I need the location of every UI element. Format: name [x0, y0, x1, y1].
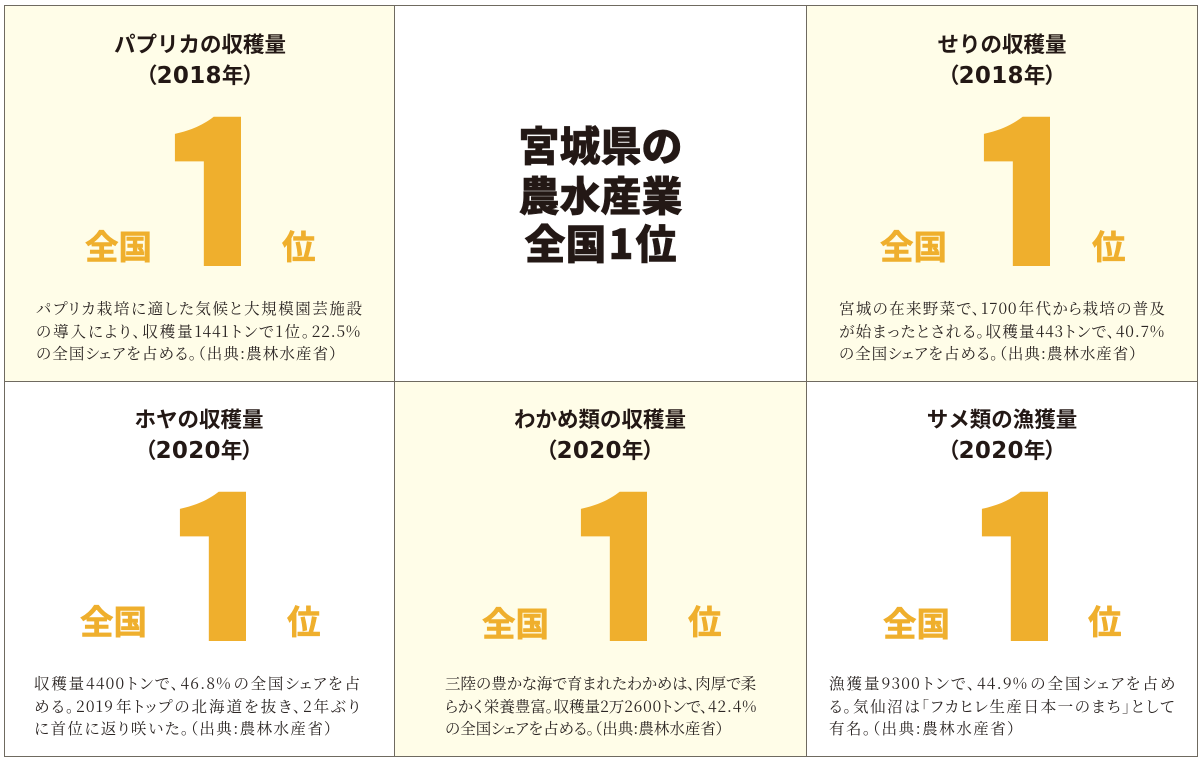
heading: seri: せりの収穫量	[937, 32, 1066, 56]
description	[839, 297, 1165, 364]
panel: seri	[807, 6, 1197, 381]
description: が始まったとされる。収穫量443トンで、40.7%	[839, 320, 1165, 342]
description: の全国シェアを占める。（出典:農林水産省）	[36, 342, 337, 364]
heading: wakame: わかめ類の収穫量	[514, 408, 686, 432]
heading: main title: 農水産業	[518, 162, 682, 222]
description: の全国シェアを占める。（出典:農林水産省）	[839, 342, 1137, 364]
heading: main title	[518, 113, 682, 271]
heading: paprika	[114, 32, 286, 90]
description: 有名。（出典:農林水産省）	[829, 717, 1015, 739]
heading: hoya: （2020年）	[145, 434, 253, 465]
label: zenkoku: 全国	[85, 230, 152, 267]
heading: seri	[937, 32, 1066, 90]
heading: hoya	[134, 408, 264, 465]
description: 三陸の豊かな海で育まれたわかめは、肉厚で柔	[445, 672, 756, 694]
label: zenkoku: 全国	[880, 230, 947, 267]
description: 宮城の在来野菜で、1700年代から栽培の普及	[839, 297, 1165, 319]
heading: paprika: パプリカの収穫量	[114, 32, 286, 56]
label: rank: 位	[1092, 230, 1126, 267]
label: zenkoku: 全国	[482, 607, 549, 644]
description: に首位に返り咲いた。（出典:農林水産省）	[34, 717, 332, 739]
description: の導入により、収穫量1441トンで1位。22.5%	[36, 320, 361, 342]
panel: center title	[395, 6, 806, 381]
label: zenkoku: 全国	[80, 605, 147, 642]
panel: hoya	[34, 408, 360, 739]
heading: wakame	[514, 408, 686, 465]
description: める。2019年トップの北海道を抜き、2年ぶり	[34, 695, 360, 717]
panel: paprika	[5, 6, 394, 381]
heading: main title: 宮城県の	[518, 113, 682, 173]
label: rank: 位	[282, 230, 316, 267]
description: 漁獲量9300トンで、44.9%の全国シェアを占め	[829, 672, 1175, 694]
heading: shark: サメ類の漁獲量	[927, 408, 1077, 432]
heading: paprika: （2018年）	[146, 59, 254, 90]
heading: shark: （2020年）	[948, 434, 1056, 465]
label: rank: 位	[287, 605, 320, 642]
panel: wakame	[395, 382, 806, 756]
description	[36, 297, 362, 364]
heading: shark	[927, 408, 1077, 465]
description	[445, 672, 757, 739]
description: らかく栄養豊富。収穫量2万2600トンで、42.4%	[445, 695, 757, 717]
label: zenkoku: 全国	[883, 607, 950, 644]
description: 収穫量4400トンで、46.8%の全国シェアを占	[34, 672, 360, 694]
heading: hoya: ホヤの収穫量	[134, 408, 264, 432]
description: の全国シェアを占める。（出典:農林水産省）	[445, 717, 724, 739]
description	[34, 672, 360, 739]
heading: seri: （2018年）	[948, 59, 1056, 90]
description: る。気仙沼は「フカヒレ生産日本一のまち」として	[829, 695, 1174, 717]
heading: main title: 全国1位	[524, 211, 676, 271]
description: パプリカ栽培に適した気候と大規模園芸施設	[36, 297, 362, 319]
heading: wakame: （2020年）	[546, 434, 654, 465]
panel: shark	[829, 408, 1175, 739]
label: rank: 位	[1088, 605, 1122, 642]
description	[829, 672, 1175, 739]
label: rank: 位	[688, 605, 722, 642]
